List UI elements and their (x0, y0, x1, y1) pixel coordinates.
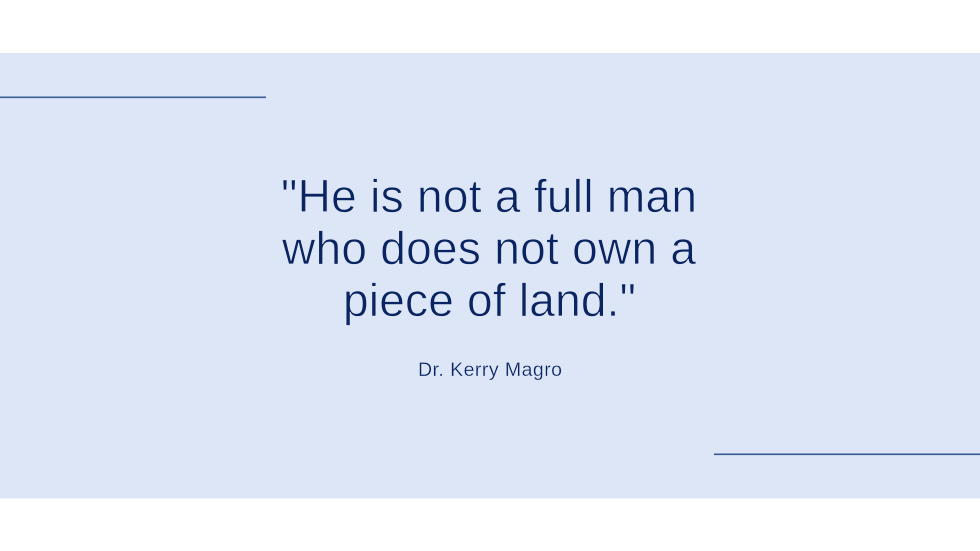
bottom-right accent line (714, 454, 980, 455)
quote text: "He is not a full man (281, 170, 697, 222)
top-left accent line (0, 96, 266, 98)
quote text: who does not own a (281, 222, 696, 274)
quote text: piece of land." (343, 274, 636, 326)
quote text (281, 170, 697, 326)
attribution: Dr. Kerry Magro (418, 359, 562, 381)
